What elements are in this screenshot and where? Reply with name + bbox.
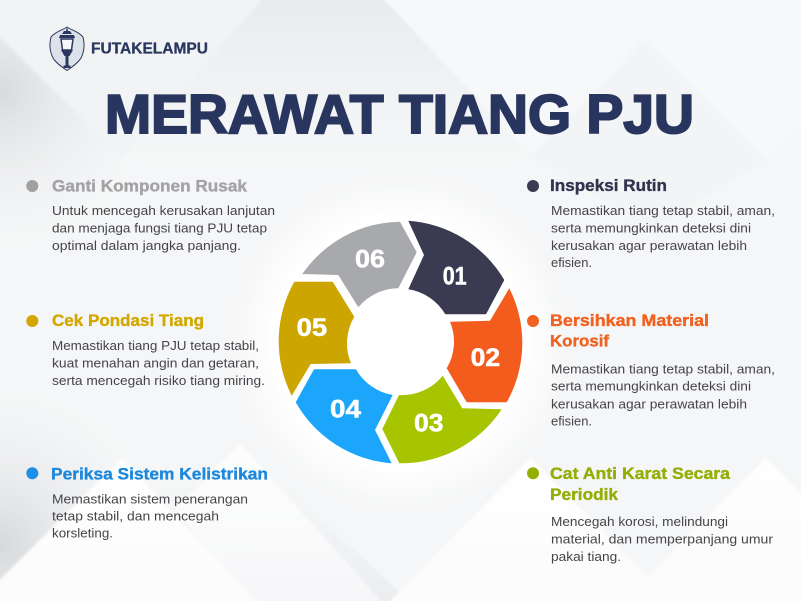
body text: Memastikan sistem penerangan xyxy=(52,492,248,506)
segment 02 xyxy=(447,288,522,402)
body text xyxy=(551,204,775,270)
heading: Cek Pondasi Tiang xyxy=(52,312,204,330)
title: MERAWAT TIANG PJU xyxy=(105,84,694,145)
body text: efisien. xyxy=(551,256,592,270)
heading: Ganti Komponen Rusak xyxy=(52,178,248,196)
logo: Futakelampu xyxy=(50,27,208,70)
segment 04 xyxy=(296,369,393,463)
panel: Bersihkan Material Korosif xyxy=(527,312,775,428)
body text xyxy=(52,492,248,541)
segment 04: 04 xyxy=(330,396,361,424)
body text: serta memungkinkan deteksi dini xyxy=(551,221,751,235)
body text: material, dan memperpanjang umur xyxy=(551,532,773,546)
body text: Memastikan tiang tetap stabil, aman, xyxy=(551,362,775,376)
body text: tetap stabil, dan mencegah xyxy=(52,510,219,524)
heading: Cat Anti Karat Secara xyxy=(550,465,731,483)
panel: Periksa Sistem Kelistrikan xyxy=(26,465,268,541)
body text: serta memungkinkan deteksi dini xyxy=(551,380,751,394)
panel: Cek Pondasi Tiang xyxy=(26,312,265,388)
segment 06 xyxy=(302,222,417,307)
segment 05: 05 xyxy=(297,314,327,342)
body text: Mencegah korosi, melindungi xyxy=(551,515,728,529)
panel: Cat Anti Karat Secara Periodik xyxy=(527,465,773,564)
bullet xyxy=(527,315,539,327)
body text: Memastikan tiang PJU tetap stabil, xyxy=(52,339,259,353)
heading xyxy=(550,312,709,351)
body text: pakai tiang. xyxy=(551,550,621,564)
cycle diagram xyxy=(279,221,522,463)
segment 06: 06 xyxy=(355,246,385,274)
body text: kerusakan agar perawatan lebih xyxy=(551,239,747,253)
bullet xyxy=(527,467,539,479)
body text xyxy=(52,204,275,253)
panel: Ganti Komponen Rusak xyxy=(26,178,275,253)
body text: korsleting. xyxy=(52,527,113,541)
body text: optimal dalam jangka panjang. xyxy=(52,239,241,253)
body text: kuat menahan angin dan getaran, xyxy=(52,356,259,370)
segment 01: 01 xyxy=(443,263,467,291)
bullet xyxy=(26,315,38,327)
heading: Bersihkan Material xyxy=(550,312,709,330)
bullet xyxy=(527,180,539,192)
body text xyxy=(52,339,265,388)
body text: Untuk mencegah kerusakan lanjutan xyxy=(52,204,275,218)
heading: Korosif xyxy=(550,333,610,351)
body text: Memastikan tiang tetap stabil, aman, xyxy=(551,204,775,218)
bullet xyxy=(26,467,38,479)
body text: efisien. xyxy=(551,414,592,428)
body text: serta mencegah risiko tiang miring. xyxy=(52,374,265,388)
segment 03 xyxy=(382,376,502,463)
segment 03: 03 xyxy=(414,410,444,438)
segment 02: 02 xyxy=(471,344,500,372)
bullet xyxy=(26,180,38,192)
heading: Inspeksi Rutin xyxy=(550,177,667,195)
segment 01 xyxy=(408,221,504,314)
body text: dan menjaga fungsi tiang PJU tetap xyxy=(52,221,267,235)
heading xyxy=(550,465,731,504)
icon: street lamp shield xyxy=(50,27,84,70)
heading: Periksa Sistem Kelistrikan xyxy=(51,465,268,483)
logo wordmark: FUTAKELAMPU xyxy=(91,40,208,58)
body text: kerusakan agar perawatan lebih xyxy=(551,397,747,411)
panel: Inspeksi Rutin xyxy=(527,177,775,270)
body text xyxy=(551,362,775,428)
body text xyxy=(551,515,773,564)
segment 05 xyxy=(279,282,354,396)
heading: Periodik xyxy=(550,486,619,504)
